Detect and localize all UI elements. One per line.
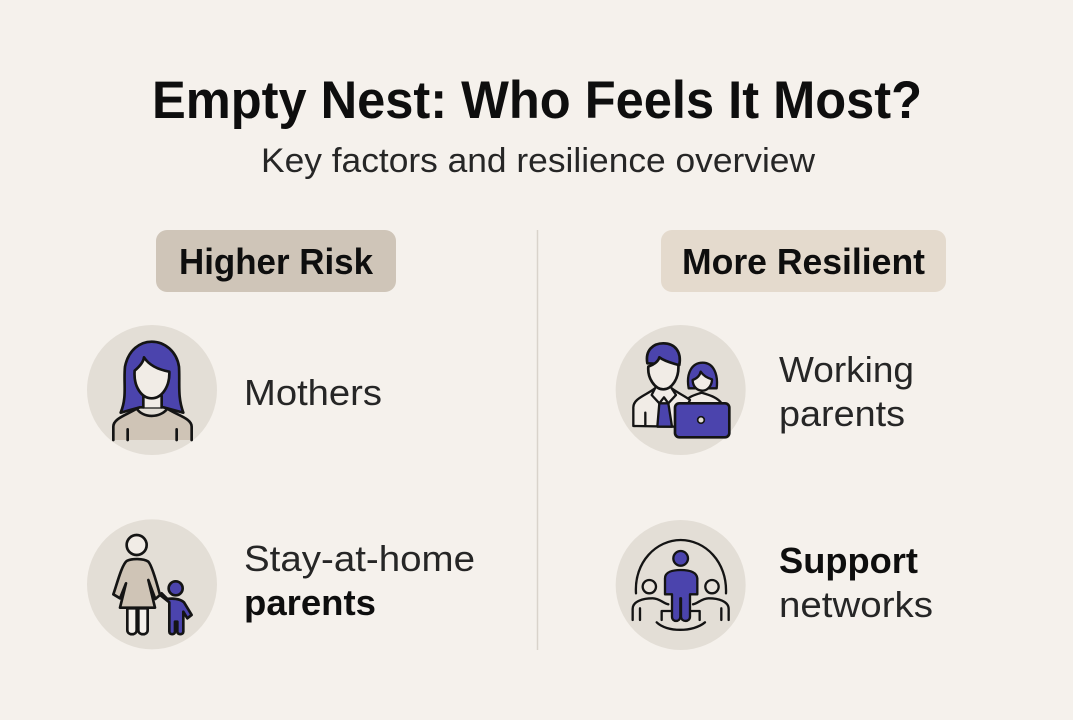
label: mothers: Mothers: [244, 372, 382, 413]
icon: working parents: [616, 325, 746, 455]
badge: higher risk: Higher Risk: [179, 241, 374, 282]
badge: more resilient: [661, 230, 946, 292]
subtitle: Key factors and resilience overview: [261, 142, 815, 180]
icon: support network: [616, 520, 746, 650]
label: working parents: Working: [779, 349, 914, 390]
badge: higher risk: [156, 230, 396, 292]
label: working parents: [779, 349, 914, 434]
title: Empty Nest: Who Feels It Most?: [152, 71, 922, 130]
label: stay-at-home parents: parents: [244, 582, 376, 623]
label: support networks: Support: [779, 540, 918, 581]
icon: mother: [87, 325, 217, 455]
badge: more resilient: More Resilient: [682, 241, 925, 282]
label: working parents: parents: [779, 393, 905, 434]
icon: parent and child: [87, 519, 217, 649]
label: support networks: [779, 540, 933, 625]
label: stay-at-home parents: [244, 538, 475, 623]
label: support networks: networks: [779, 584, 933, 625]
label: stay-at-home parents: Stay-at-home: [244, 538, 475, 579]
